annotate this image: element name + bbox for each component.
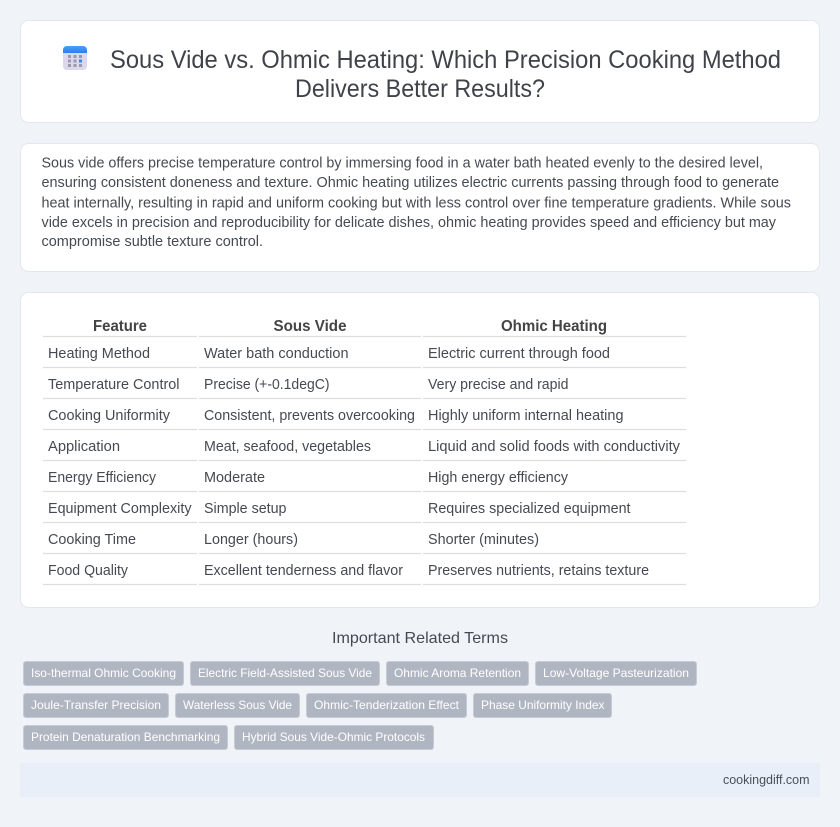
table rows: Requires specialized equipment xyxy=(428,501,630,517)
comparison table panel xyxy=(20,292,820,608)
summary text: vide excels in precision and reproducibility for delicate dishes, ohmic heating provides speed and efficiency but may xyxy=(42,215,777,231)
summary panel xyxy=(20,144,820,272)
table rows: Excellent tenderness and flavor xyxy=(204,563,403,579)
table rows: Temperature Control xyxy=(48,377,180,393)
table rows: Moderate xyxy=(204,470,265,486)
table header: Feature xyxy=(93,318,147,335)
summary text: heat internally, resulting in rapid and uniform cooking but with less control over fine temperature gradients. While sous xyxy=(42,196,791,212)
table header: Sous Vide xyxy=(274,318,347,335)
table rows: Heating Method xyxy=(48,346,150,362)
table rows: Highly uniform internal heating xyxy=(428,408,624,424)
table rows: Energy Efficiency xyxy=(48,470,157,486)
table rows: Equipment Complexity xyxy=(48,501,192,517)
summary text: Sous vide offers precise temperature control by immersing food in a water bath heated evenly to the desired level, xyxy=(42,156,763,172)
related term tags: Low-Voltage Pasteurization xyxy=(543,666,689,680)
table rows: Electric current through food xyxy=(428,346,610,362)
footer: cookingdiff.com xyxy=(723,773,810,787)
related term tags: Ohmic Aroma Retention xyxy=(394,666,521,680)
footer xyxy=(20,763,820,797)
table rows: Meat, seafood, vegetables xyxy=(204,439,371,455)
title panel xyxy=(20,20,820,122)
summary text: ensuring consistent doneness and texture. Ohmic heating utilizes electric currents passing through food to generate xyxy=(42,175,779,191)
table rows: Preserves nutrients, retains texture xyxy=(428,563,649,579)
related term tags: Joule-Transfer Precision xyxy=(31,698,161,712)
table rows: Food Quality xyxy=(48,563,129,579)
table rows xyxy=(48,346,681,579)
table rows: Application xyxy=(48,439,120,455)
related term tags: Electric Field-Assisted Sous Vide xyxy=(198,666,372,680)
table rows: Simple setup xyxy=(204,501,286,517)
table rows: High energy efficiency xyxy=(428,470,569,486)
related term tags: Hybrid Sous Vide-Ohmic Protocols xyxy=(242,730,425,744)
table rows: Very precise and rapid xyxy=(428,377,568,393)
table rows: Consistent, prevents overcooking xyxy=(204,408,415,424)
table rows: Shorter (minutes) xyxy=(428,532,539,548)
related terms heading: Important Related Terms xyxy=(332,630,508,647)
table rows: Cooking Uniformity xyxy=(48,408,171,424)
title: Sous Vide vs. Ohmic Heating: Which Precision Cooking Method xyxy=(110,46,781,74)
related term tags: Phase Uniformity Index xyxy=(481,698,604,712)
summary text: compromise subtle texture control. xyxy=(42,234,263,250)
related term tags: Waterless Sous Vide xyxy=(183,698,292,712)
related term tags: Protein Denaturation Benchmarking xyxy=(31,730,220,744)
related term tags: Ohmic-Tenderization Effect xyxy=(314,698,460,712)
table rows: Liquid and solid foods with conductivity xyxy=(428,439,681,455)
summary text xyxy=(42,156,791,250)
table header xyxy=(93,318,607,335)
icon: calendar xyxy=(63,46,87,70)
title xyxy=(110,46,781,103)
title: Delivers Better Results? xyxy=(295,75,545,103)
table header: Ohmic Heating xyxy=(501,318,607,335)
table rows: Water bath conduction xyxy=(204,346,348,362)
related term tags xyxy=(24,662,696,750)
table rows: Longer (hours) xyxy=(204,532,298,548)
table rows: Cooking Time xyxy=(48,532,136,548)
table rows: Precise (+-0.1degC) xyxy=(204,377,330,393)
related term tags: Iso-thermal Ohmic Cooking xyxy=(31,666,176,680)
